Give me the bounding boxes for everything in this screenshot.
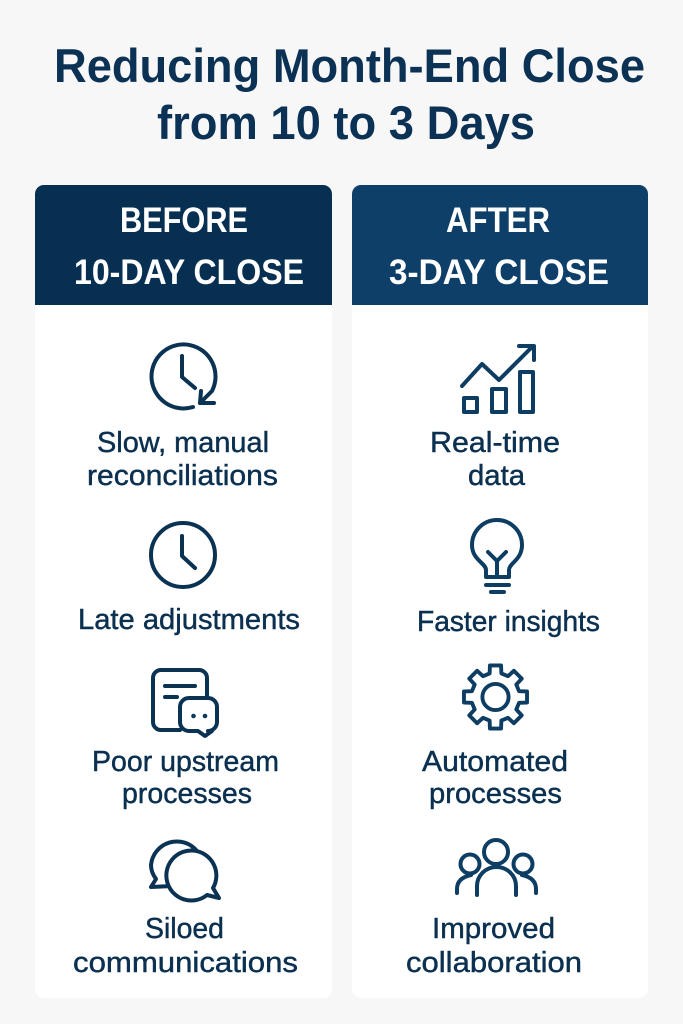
text: automated processes: processes [429, 778, 562, 810]
header: after 3-day close: 3-DAY CLOSE [389, 253, 609, 292]
header: before 10-day close: BEFORE [120, 201, 248, 240]
text: late adjustments: Late adjustments [78, 604, 300, 636]
icon: light bulb [472, 520, 522, 592]
header: before 10-day close: 10-DAY CLOSE [74, 253, 304, 292]
icon: document with chat bubble [153, 670, 217, 736]
text: poor upstream processes: processes [122, 778, 252, 810]
text: poor upstream processes [92, 746, 279, 810]
panel: before [35, 185, 332, 998]
text: improved collaboration: Improved [432, 913, 555, 945]
text: faster insights: Faster insights [417, 606, 600, 638]
text: siloed communications: Siloed [145, 913, 224, 945]
panel background: after [352, 186, 648, 998]
text: real-time data: Real-time [430, 427, 560, 459]
icon: overlapping speech bubbles [151, 841, 219, 901]
title: from 10 to 3 Days [157, 96, 535, 149]
text: improved collaboration: collaboration [406, 947, 582, 979]
text: siloed communications: communications [73, 947, 298, 979]
text: real-time data: data [468, 460, 525, 492]
icon: rising bar chart [462, 346, 534, 412]
header: after 3-day close [352, 185, 648, 305]
title: Reducing Month-End Close [54, 39, 645, 92]
text: slow, manual reconciliations: Slow, manual [97, 427, 269, 459]
icon: group of people [457, 840, 536, 895]
text: improved collaboration [406, 913, 582, 979]
icon: clock [151, 523, 215, 587]
icon: gear [464, 665, 527, 729]
header: before 10-day close [35, 185, 332, 305]
text: automated processes [422, 746, 568, 810]
icon: clock with return arrow [152, 344, 216, 408]
text: siloed communications [73, 913, 298, 979]
header: after 3-day close: AFTER [446, 201, 550, 240]
text: automated processes: Automated [422, 746, 568, 778]
text: real-time data [430, 427, 560, 492]
panel background: before [35, 186, 332, 998]
panel: after [352, 185, 648, 998]
text: slow, manual reconciliations: reconciliations [87, 460, 278, 492]
text: slow, manual reconciliations [87, 427, 278, 492]
title [54, 39, 645, 149]
text: poor upstream processes: Poor upstream [92, 746, 279, 778]
